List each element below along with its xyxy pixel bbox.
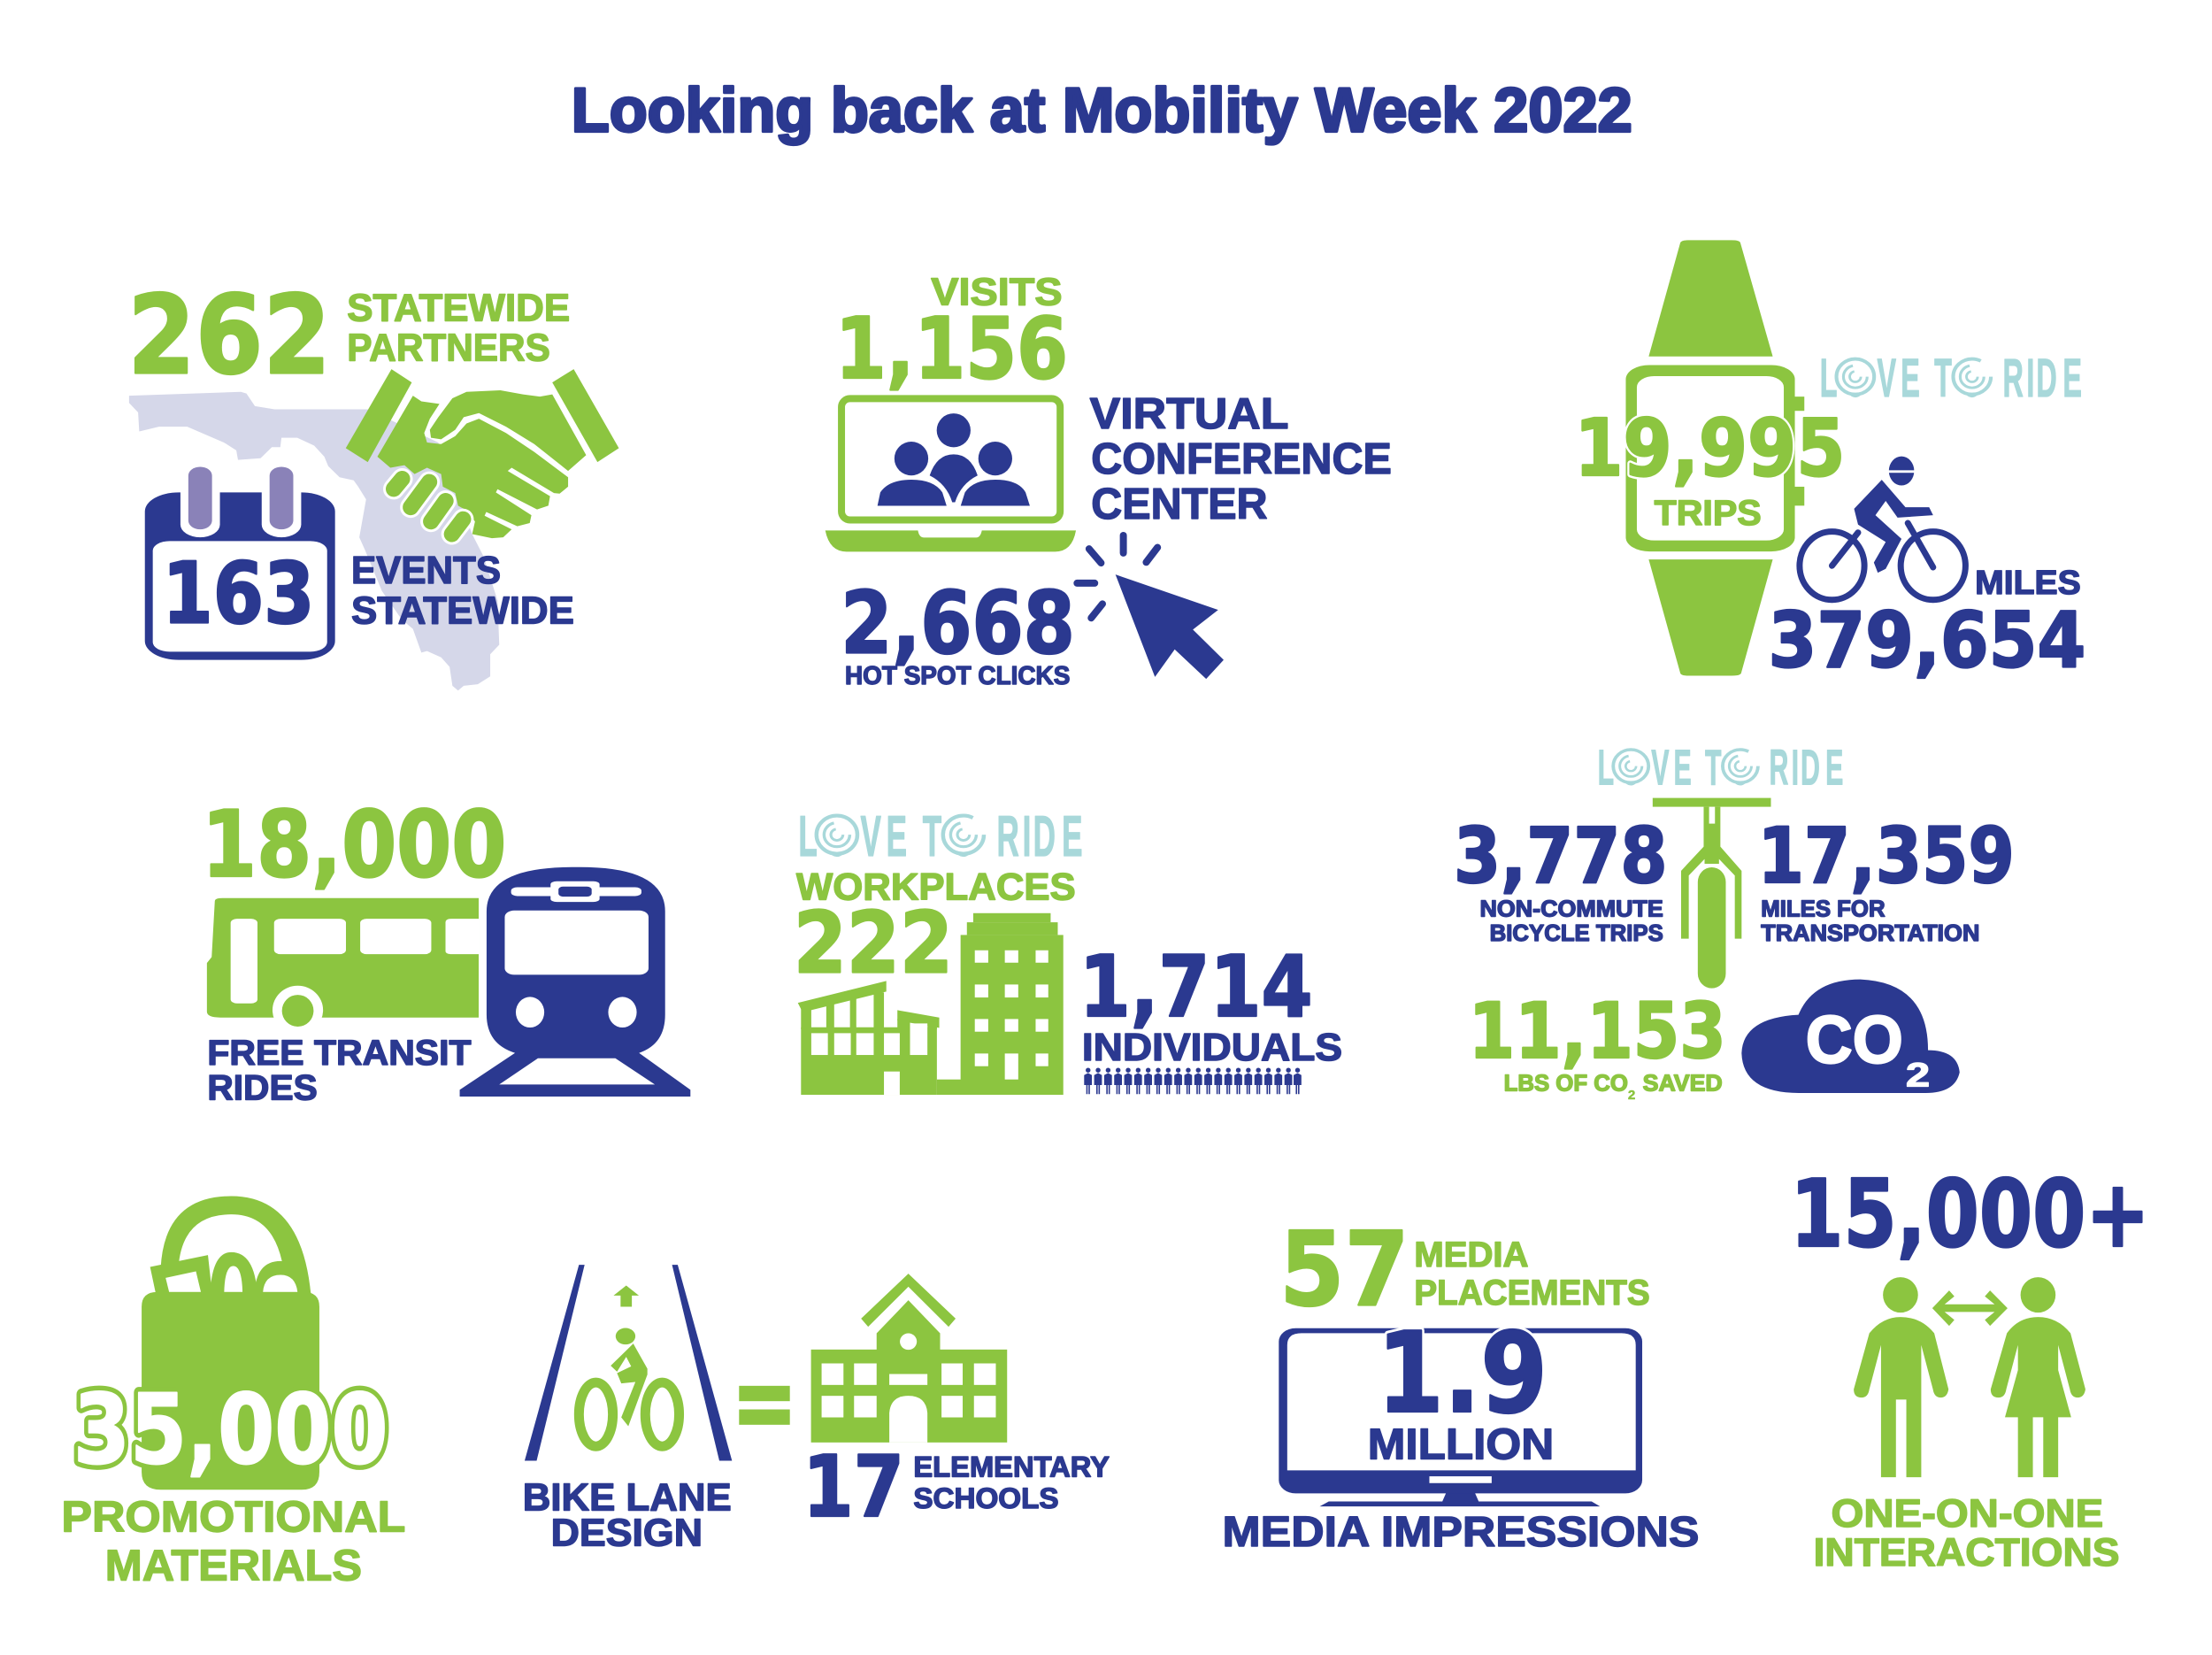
icon: train [460,867,690,1097]
label: lbs of CO2 saved [1504,1071,1723,1103]
icon: monitor [1279,1328,1642,1506]
panel: love to ride workplaces [794,805,1342,1095]
label: miles for transportation: TRANSPORTATION [1761,921,1979,946]
label: events statewide [351,549,574,633]
icon: bike lane [525,1265,732,1461]
label: virtual conference center: CENTER [1091,480,1268,528]
label: bike lane design: DESIGN [551,1511,703,1554]
label: lbs of CO2 saved: 2 [1628,1088,1635,1103]
panel: love to ride watch [1574,240,2085,685]
panel: love to ride bicycle trips and CO2 [1454,739,2015,1103]
icon: CO2 cloud [1741,980,1960,1095]
number: 35,000: 35,000 [73,1374,388,1486]
number: 1,156: 1,156 [835,299,1068,398]
label: one-on-one interactions: ONE-ON-ONE [1832,1492,2103,1536]
label: non-commute bicycle trips: BICYCLE TRIPS [1490,921,1663,946]
label: virtual conference center [1090,389,1392,528]
number: 35,000: 35,000 [73,1374,388,1486]
number: 1.9: 1.9 [1377,1308,1548,1438]
map: Florida [129,392,499,690]
label: non-commute bicycle trips [1480,897,1663,946]
panel: free transit rides [202,792,690,1107]
icon: calendar [145,466,335,660]
label: statewide partners [347,287,570,369]
number: 379,654: 379,654 [1769,597,2085,685]
label: free transit rides [207,1034,472,1107]
title: Looking back at Mobility Week 2022 [572,75,1632,144]
icon: equals sign [739,1386,790,1425]
number: 163: 163 [162,544,315,643]
number: 11,153: 11,153 [1469,988,1726,1076]
label: trips: TRIPS [1655,494,1762,533]
icon: smartwatch [1625,240,1804,675]
label: promotional materials: MATERIALS [105,1542,362,1590]
label: one-on-one interactions: INTERACTIONS [1814,1531,2120,1574]
number: 17,359: 17,359 [1758,812,2015,901]
panel: statewide partners and events [127,273,618,690]
icon: buildings [798,913,1064,1095]
number: 2,668: 2,668 [841,573,1075,673]
panel: bike lane design [523,1265,1110,1554]
icon: school [811,1274,1007,1443]
label: media placements [1414,1235,1650,1312]
label: bike lane design [523,1476,732,1554]
label: statewide partners: PARTNERS [347,326,550,369]
number: 262: 262 [127,273,331,399]
icon: bicycle front view [1653,798,1770,989]
logo: love to ride: LOVE TO RIDE [1598,739,1843,796]
label: miles for transportation [1761,897,1979,946]
panel: promotional materials [61,1197,405,1590]
logo: love to ride: LOVE TO RIDE [1820,349,2082,409]
label: media placements: MEDIA [1414,1235,1529,1274]
icon: row of people [1084,1067,1302,1094]
label: hot spot clicks: HOT SPOT CLICKS [845,662,1070,690]
label: one-on-one interactions [1814,1492,2120,1574]
label: workplaces: WORKPLACES [796,866,1076,907]
label: elementary schools: SCHOOLS [913,1482,1059,1514]
number: 19,995: 19,995 [1574,403,1845,495]
label: elementary schools: ELEMENTARY [913,1450,1110,1482]
number: 3,778: 3,778 [1454,812,1668,901]
label: miles: MILES [1975,564,2081,602]
label: million: MILLION [1368,1420,1554,1468]
label: events statewide: EVENTS [351,549,501,592]
number: 1,714: 1,714 [1079,937,1313,1036]
icon: laptop with people [826,398,1076,551]
panel: one-on-one interactions [1790,1159,2150,1574]
label: media placements: PLACEMENTS [1414,1274,1650,1312]
number: 18,000: 18,000 [202,792,506,898]
label: lbs of CO2 saved: LBS OF CO [1504,1071,1628,1096]
icon: CO2 cloud: 2 [1906,1057,1930,1095]
number: 222: 222 [794,893,953,992]
label: media impressions: MEDIA IMPRESSIONS [1223,1508,1699,1556]
label: virtual conference center: VIRTUAL [1090,389,1288,438]
icon: CO2 cloud: CO [1806,1003,1903,1078]
icon: handshake [346,369,618,538]
label: events statewide: STATEWIDE [351,589,574,633]
icon: two people with arrow [1854,1277,2085,1477]
label: lbs of CO2 saved: SAVED [1643,1071,1723,1096]
number: 19,995: 19,995 [1574,403,1845,495]
number: 17: 17 [803,1437,904,1536]
label: non-commute bicycle trips: NON-COMMUTE [1480,897,1663,921]
label: miles for transportation: MILES FOR [1761,897,1886,921]
label: virtual conference center: CONFERENCE [1091,435,1392,483]
label: promotional materials [61,1493,405,1590]
icon: bag with items [142,1197,319,1490]
icon: cursor click [1077,535,1224,679]
number: 57: 57 [1279,1211,1409,1330]
panel: virtual conference center [826,270,1392,690]
label: elementary schools [913,1450,1110,1514]
label: free transit rides: FREE TRANSIT [207,1034,472,1073]
label: visits: VISITS [931,270,1063,313]
label: bike lane design: BIKE LANE [523,1476,732,1520]
panel: media impressions [1223,1211,1699,1556]
label: promotional materials: PROMOTIONAL [61,1493,405,1542]
label: free transit rides: RIDES [207,1068,318,1107]
label: statewide partners: STATEWIDE [347,287,570,330]
icon: bus [207,898,479,1035]
logo: love to ride: LOVE TO RIDE [798,805,1082,869]
label: individuals: INDIVIDUALS [1082,1026,1342,1069]
number: 1.9: 1.9 [1377,1308,1548,1438]
icon: cyclist [1800,457,1965,600]
